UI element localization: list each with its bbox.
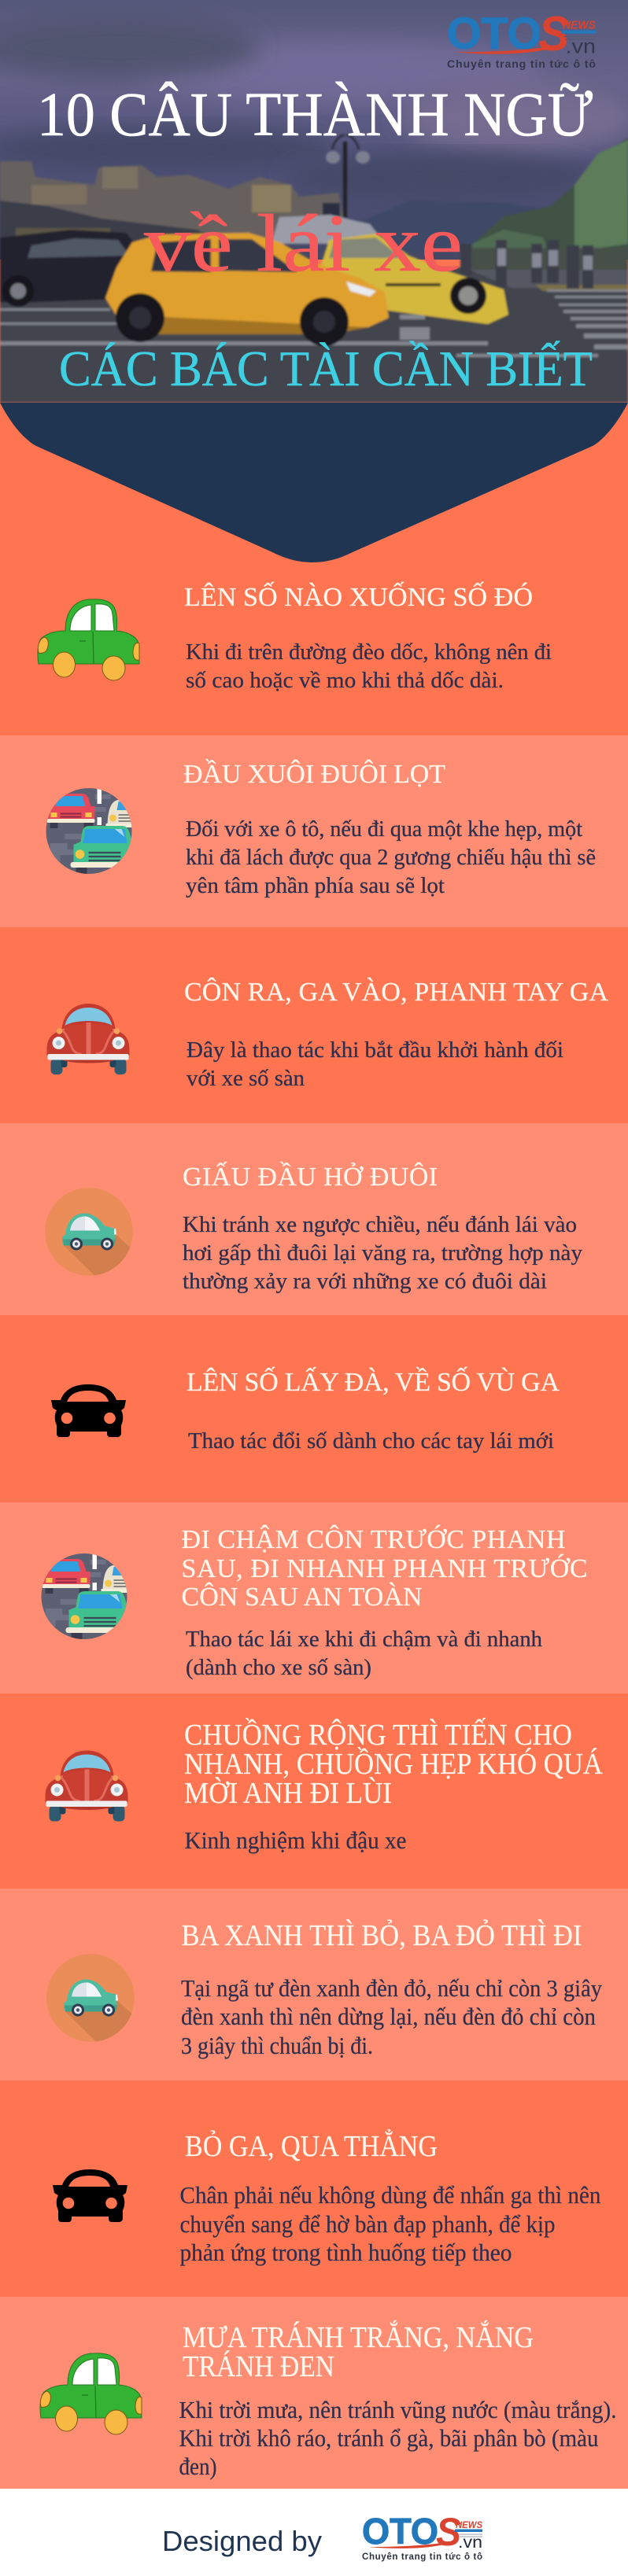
icon: teal car badge — [45, 1188, 133, 1276]
logo: OTOS news — [447, 7, 596, 71]
text: item 9: Chân phải nếu không dùng để nhấn ga thì nên — [179, 2181, 601, 2209]
heading: item 6 — [181, 1524, 587, 1612]
panel: item 7 — [0, 1693, 628, 1889]
panel: item 8 — [0, 1889, 628, 2080]
text: item 2: yên tâm phần phía sau sẽ lọt — [186, 874, 445, 898]
icon: black car — [51, 1384, 126, 1437]
footer — [162, 2510, 482, 2562]
heading: item 10 — [183, 2320, 534, 2383]
heading: item 7: MỜI ANH ĐI LÙI — [184, 1777, 392, 1810]
text: item 9: phản ứng trong tình huống tiếp theo — [179, 2239, 512, 2266]
logo: OTOS news: NEWS — [456, 2519, 482, 2530]
designed by credit: Designed by — [162, 2525, 322, 2557]
heading: item 9: BỎ GA, QUA THẲNG — [185, 2129, 438, 2163]
heading: item 8: BA XANH THÌ BỎ, BA ĐỎ THÌ ĐI — [181, 1918, 582, 1952]
heading: item 1: LÊN SỐ NÀO XUỐNG SỐ ĐÓ — [184, 581, 533, 612]
logo: OTOS news: Chuyên trang tin tức ô tô — [362, 2552, 482, 2562]
text: item 6 — [186, 1627, 542, 1680]
panel: item 5 — [0, 1315, 628, 1502]
logo: OTOS news: .vn — [566, 35, 596, 57]
icon: red beetle — [47, 1004, 129, 1074]
heading: item 4: GIẤU ĐẦU HỞ ĐUÔI — [183, 1162, 438, 1192]
heading: item 7: CHUỒNG RỘNG THÌ TIẾN CHO — [184, 1717, 572, 1752]
text: item 10: Khi trời khô ráo, tránh ổ gà, bãi phân bò (màu — [179, 2424, 598, 2452]
heading: item 5: LÊN SỐ LẤY ĐÀ, VỀ SỐ VÙ GA — [187, 1366, 560, 1397]
logo: OTOS news — [362, 2510, 482, 2562]
text: item 2: Đối với xe ô tô, nếu đi qua một khe hẹp, một — [186, 817, 582, 842]
panel: item 1 — [0, 566, 628, 735]
logo: OTOS news: S — [436, 2510, 461, 2554]
panel: item 9 — [0, 2080, 628, 2297]
heading: item 10: TRÁNH ĐEN — [183, 2350, 334, 2383]
text: item 8 — [181, 1974, 602, 2059]
logo: OTOS news: .vn — [458, 2534, 482, 2552]
text: item 5: Thao tác đổi số dành cho các tay lái mới — [188, 1429, 554, 1454]
panel: item 4 — [0, 1123, 628, 1315]
text: item 8: Tại ngã tư đèn xanh đèn đỏ, nếu chỉ còn 3 giây — [181, 1974, 602, 2002]
text: item 4 — [183, 1213, 582, 1294]
logo: OTOS news: OTO — [362, 2511, 438, 2552]
panel: item 6 — [0, 1502, 628, 1693]
heading: item 6: ĐI CHẬM CÔN TRƯỚC PHANH — [181, 1524, 565, 1554]
text: item 3 — [187, 1038, 563, 1091]
logo: OTOS news: Chuyên trang tin tức ô tô — [447, 58, 596, 71]
text: item 3: với xe số sàn — [187, 1067, 305, 1091]
text: item 3: Đây là thao tác khi bắt đầu khởi hành đối — [187, 1038, 563, 1063]
navy chevron — [0, 403, 628, 562]
logo: OTOS news: NEWS — [563, 20, 596, 32]
title line 3: CÁC BÁC TÀI CẦN BIẾT — [59, 341, 593, 396]
text: item 9 — [179, 2181, 601, 2266]
icon: teal car badge — [46, 1954, 135, 2042]
text: item 1 — [186, 640, 552, 693]
panel: item 2 — [0, 735, 628, 927]
icon: red beetle — [46, 1751, 127, 1822]
panel: header photo with title — [0, 0, 628, 566]
icon: black car — [53, 2169, 127, 2222]
title line 2: về lái xe — [144, 198, 463, 289]
text: item 8: đèn xanh thì nên dừng lại, nếu đèn đỏ chỉ còn — [181, 2003, 596, 2030]
icon: traffic circle — [46, 788, 132, 874]
text: item 9: chuyển sang để hờ bàn đạp phanh, để kịp — [179, 2210, 556, 2238]
heading: item 6: SAU, ĐI NHANH PHANH TRƯỚC — [181, 1553, 587, 1583]
text: item 1: số cao hoặc về mo khi thả dốc dài. — [186, 669, 504, 693]
logo: OTOS news: OTO — [447, 9, 541, 58]
icon: green car — [38, 599, 139, 680]
text: item 2 — [186, 817, 596, 898]
heading: item 2: ĐẦU XUÔI ĐUÔI LỌT — [183, 759, 445, 789]
text: item 4: thường xảy ra với những xe có đuôi dài — [183, 1270, 547, 1294]
icon: green car — [40, 2353, 142, 2434]
heading: item 7 — [184, 1717, 603, 1810]
heading: item 3: CÔN RA, GA VÀO, PHANH TAY GA — [184, 977, 608, 1007]
text: item 7: Kinh nghiệm khi đậu xe — [184, 1826, 406, 1854]
street photo — [0, 0, 628, 403]
panel: item 3 — [0, 927, 628, 1123]
text: item 6: Thao tác lái xe khi đi chậm và đi nhanh — [186, 1627, 542, 1652]
title line 1: 10 CÂU THÀNH NGỮ — [37, 81, 593, 149]
text: item 4: Khi tránh xe ngược chiều, nếu đánh lái vào — [183, 1213, 577, 1237]
icon: traffic circle — [41, 1553, 127, 1639]
logo: OTOS news: S — [538, 7, 570, 61]
panel: item 10 — [0, 2297, 628, 2489]
text: item 1: Khi đi trên đường đèo dốc, không nên đi — [186, 640, 552, 665]
text: item 10: đen) — [179, 2453, 217, 2480]
heading: item 10: MƯA TRÁNH TRẮNG, NẮNG — [183, 2320, 534, 2354]
text: item 4: hơi gấp thì đuôi lại văng ra, trường hợp này — [183, 1241, 582, 1266]
text: item 2: khi đã lách được qua 2 gương chiếu hậu thì sẽ — [186, 846, 596, 870]
text: item 10 — [179, 2396, 617, 2480]
text: item 6: (dành cho xe số sàn) — [186, 1656, 371, 1680]
heading: item 6: CÔN SAU AN TOÀN — [181, 1582, 422, 1612]
text: item 8: 3 giây thì chuẩn bị đi. — [181, 2032, 373, 2059]
